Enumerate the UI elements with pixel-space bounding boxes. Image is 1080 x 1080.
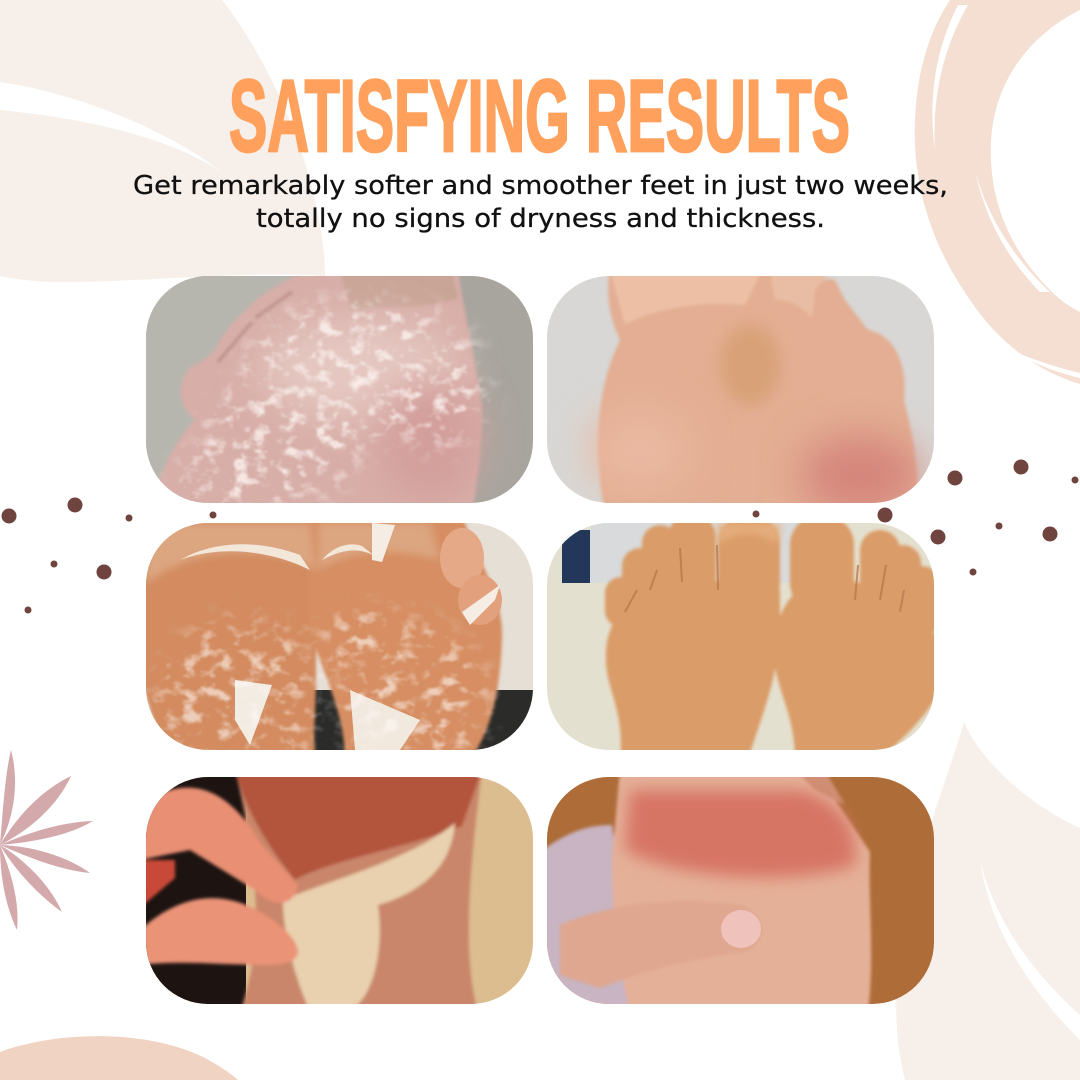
subtitle: totally no signs of dryness and thickness. xyxy=(256,204,825,234)
background blob: bottom right xyxy=(896,722,1080,1080)
photo 1: peeling foot, grey background xyxy=(146,270,533,520)
icon: flower burst xyxy=(0,750,93,930)
subtitle: Get remarkably softer and smoother feet in just two weeks, xyxy=(133,171,948,201)
background blob: top left xyxy=(0,0,325,282)
background blob: bottom left xyxy=(0,1036,238,1080)
photo 2: smooth foot, white towel background xyxy=(547,270,934,515)
dots: right cluster xyxy=(752,460,1078,576)
background brush ring: top right xyxy=(915,0,1080,384)
subtitle xyxy=(133,171,948,234)
photo 4: two smooth feet xyxy=(547,515,940,760)
photo 6: thumb on red foot xyxy=(540,770,934,1012)
photo 5: hand peeling skin from foot xyxy=(140,770,533,1012)
dots: left cluster xyxy=(2,498,216,614)
photo 3: two peeling feet xyxy=(140,515,533,760)
